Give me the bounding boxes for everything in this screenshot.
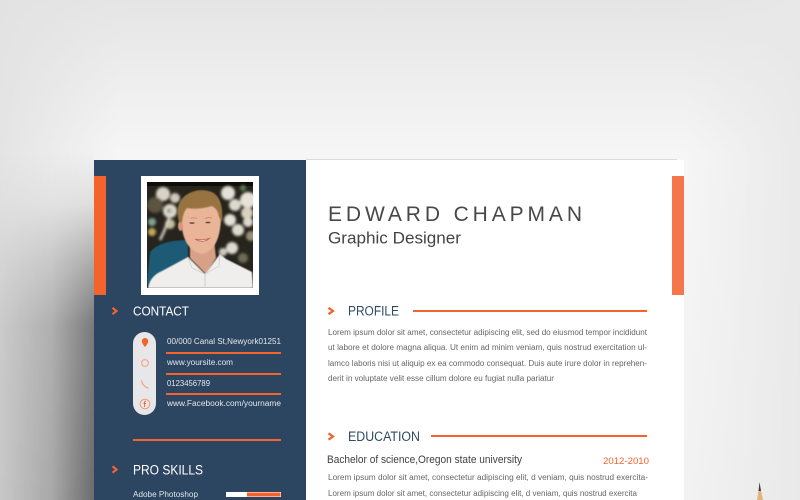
icon: phone: [142, 381, 148, 388]
education entry: Bachelor of science,Oregon state university: [327, 454, 522, 466]
icon: globe: [142, 360, 148, 366]
contact details: [166, 337, 282, 408]
icon: pencil tip: [757, 482, 763, 500]
contact details: 00/000 Canal St,Newyork01251: [167, 337, 282, 346]
hair: [178, 190, 222, 222]
ear shading: [178, 221, 183, 231]
resume page: [306, 159, 684, 500]
education dates: 2012-2010: [603, 456, 649, 467]
left accent bar: [94, 176, 106, 295]
teal garment behind: [147, 240, 188, 288]
education entry: Lorem ipsum dolor sit amet, consectetur adipiscing elit, d veniam, quis nostrud exercita-: [328, 473, 648, 482]
photo: [141, 176, 259, 295]
icon: facebook: [140, 399, 150, 409]
profile paragraph: lamco laboris nisi ut aliquip ex ea commodo consequat. Duis aute irure dolor in reprehen-: [328, 359, 647, 368]
job title: Graphic Designer: [328, 230, 462, 248]
profile paragraph: [328, 328, 648, 383]
education entry: Lorem ipsum dolor sit amet, consectetur adipiscing elit, d veniam, quis nostrud exercita: [328, 489, 638, 498]
profile paragraph: ut labore et dolore magna aliqua. Ut enim ad minim veniam, quis nostrud exercitation ul-: [328, 343, 647, 352]
contact icon pill: [133, 332, 156, 415]
shirt: [148, 254, 253, 288]
heading: education: [328, 429, 647, 444]
panel: sidebar: [94, 160, 306, 500]
heading: pro skills: PRO SKILLS: [133, 462, 203, 478]
heading: profile: PROFILE: [348, 304, 399, 318]
contact details: 0123456789: [167, 379, 211, 388]
contact details: www.Facebook.com/yourname: [166, 399, 282, 408]
heading: profile: [328, 304, 647, 318]
neck: [190, 240, 216, 274]
heading: contact: [112, 304, 189, 318]
skill: Adobe Photoshop: [133, 490, 281, 499]
eyes and smile: [189, 222, 195, 224]
heading: contact: CONTACT: [133, 304, 189, 318]
section divider: [133, 439, 281, 441]
face: [181, 205, 222, 254]
contact details: www.yoursite.com: [166, 358, 233, 367]
right accent bar: [672, 176, 684, 295]
education entry: [327, 454, 649, 498]
page drop shadow: [0, 150, 94, 500]
skill bar: [226, 492, 281, 497]
skill: Adobe Photoshop: Adobe Photoshop: [133, 490, 199, 499]
profile paragraph: Lorem ipsum dolor sit amet, consectetur adipiscing elit, sed do eiusmod tempor incididunt: [328, 328, 648, 337]
name title: EDWARD CHAPMAN: [328, 203, 582, 226]
icon: location pin: [142, 338, 148, 347]
profile paragraph: derit in voluptate velit esse cillum dolore eu fugiat nulla pariatur: [328, 374, 554, 383]
heading: education: EDUCATION: [348, 429, 420, 444]
